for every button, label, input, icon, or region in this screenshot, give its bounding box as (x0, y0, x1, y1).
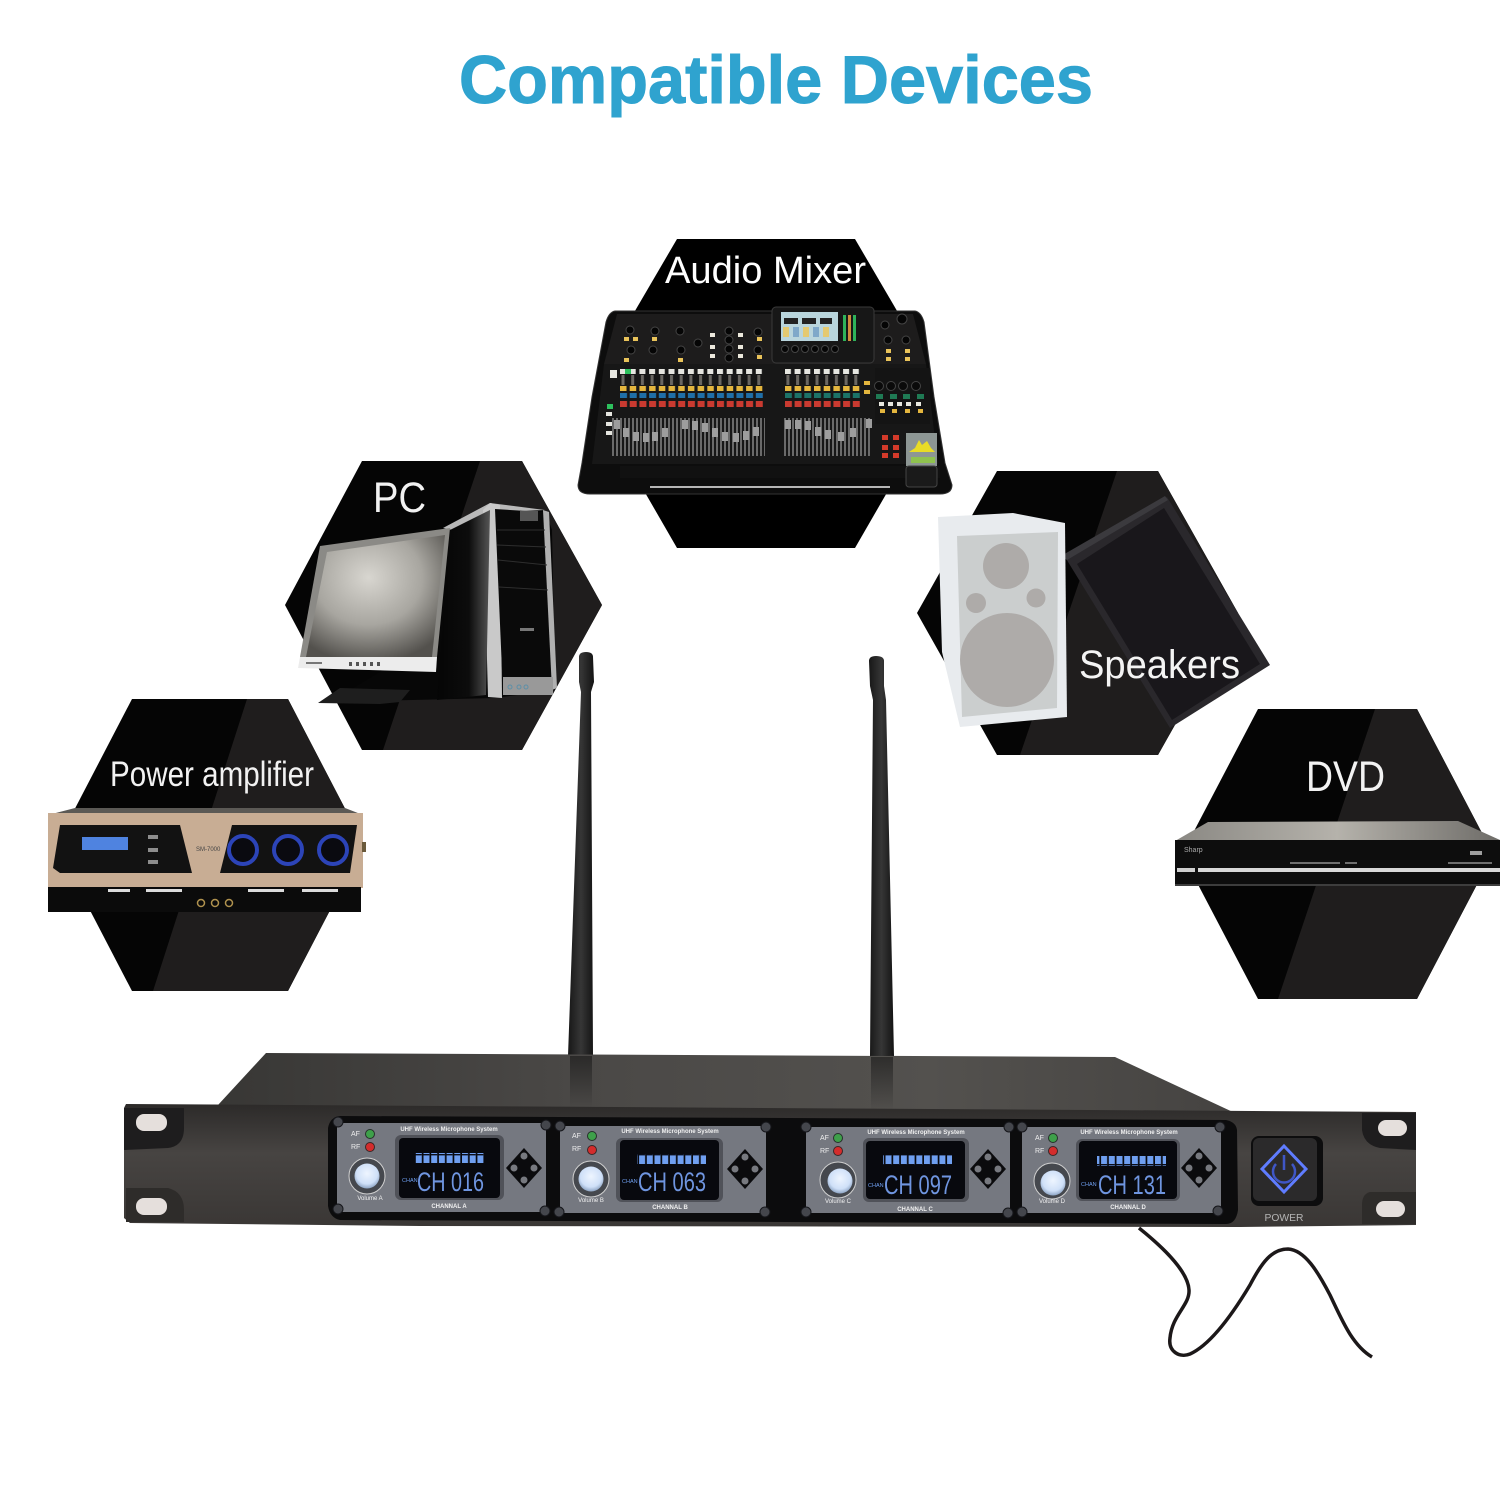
channel panel C: AF (820, 1135, 829, 1142)
device: desktop computer (298, 503, 557, 704)
hexagon: speakers (910, 465, 1250, 760)
title: Compatible Devices (459, 42, 1093, 118)
channel panel D: CH 131 (1098, 1170, 1166, 1200)
channel panel D: AF (1035, 1135, 1044, 1142)
channel panel A: Volume A (357, 1196, 383, 1202)
device: white speaker (938, 513, 1067, 727)
cable (1139, 1228, 1372, 1357)
channel panel A (333, 1117, 551, 1216)
label: audio mixer: Audio Mixer (665, 250, 866, 292)
master section buttons (606, 368, 937, 487)
channel panel C (801, 1122, 1014, 1218)
hexagon: DVD (1194, 709, 1482, 999)
right rack ear (1362, 1113, 1416, 1224)
channel panel C: CH 097 (884, 1170, 952, 1200)
channel panel B: AF (572, 1133, 581, 1140)
label: DVD: DVD (1306, 753, 1385, 801)
channel panel B: CHAN (622, 1179, 638, 1185)
device: DVD player (1175, 821, 1500, 886)
channel panel B (554, 1121, 771, 1217)
device: amplifier: SM-7000 (196, 847, 221, 853)
device: mixing console (578, 307, 952, 494)
channel panel B: UHF Wireless Microphone System (621, 1129, 719, 1135)
channel panel B: Volume B (578, 1198, 604, 1204)
black front band (328, 1116, 1238, 1224)
channel panel D: RF (1035, 1148, 1044, 1155)
hexagon: PC (280, 455, 610, 755)
channel panel A: UHF Wireless Microphone System (400, 1127, 498, 1133)
channel panel D: Volume D (1039, 1199, 1066, 1205)
channel panel B: CHANNAL B (652, 1205, 688, 1211)
panel: DVD (1175, 705, 1500, 1005)
panel: speakers (910, 465, 1270, 760)
label: power: POWER (1264, 1213, 1304, 1224)
channel strip buttons (620, 369, 860, 407)
hexagon: power amplifier (75, 699, 345, 991)
device: amplifier (48, 808, 366, 912)
faders (610, 418, 872, 456)
channel panel A: CHANNAL A (431, 1204, 467, 1210)
channel panel D: CHAN (1081, 1182, 1097, 1188)
antenna: right (869, 656, 894, 1056)
power button (1251, 1136, 1323, 1206)
receiver (124, 1053, 1416, 1227)
label: power amplifier: Power amplifier (110, 755, 314, 794)
channel panel C: Volume C (825, 1199, 852, 1205)
panel: audio mixer (578, 239, 952, 548)
channel panel C: RF (820, 1148, 829, 1155)
antenna shadows on lid (570, 1056, 893, 1111)
channel panel B: RF (572, 1146, 581, 1153)
channel panel D: CHANNAL D (1110, 1205, 1146, 1211)
channel panel D (1017, 1122, 1225, 1217)
left rack ear (124, 1108, 184, 1222)
channel panel A: CHAN (402, 1178, 418, 1184)
channel panel A: CH 016 (417, 1167, 484, 1197)
label: PC: PC (373, 474, 426, 522)
top lid (218, 1053, 1235, 1113)
antenna: left (568, 652, 594, 1056)
channel panel C: CHAN (868, 1183, 884, 1189)
panel: PC (280, 455, 610, 755)
device: DVD player: Sharp (1184, 847, 1203, 854)
front face (124, 1104, 1416, 1227)
panel: power amplifier (48, 695, 370, 995)
channel panel A: AF (351, 1131, 360, 1138)
channel panel B: CH 063 (638, 1167, 706, 1197)
channel panel A: RF (351, 1144, 360, 1151)
channel panel C: CHANNAL C (897, 1207, 933, 1213)
hexagon: audio mixer (632, 239, 900, 548)
label: speakers: Speakers (1079, 643, 1240, 687)
channel panel C: UHF Wireless Microphone System (867, 1130, 965, 1136)
channel panel D: UHF Wireless Microphone System (1080, 1130, 1178, 1136)
device: black speaker (1061, 496, 1270, 728)
